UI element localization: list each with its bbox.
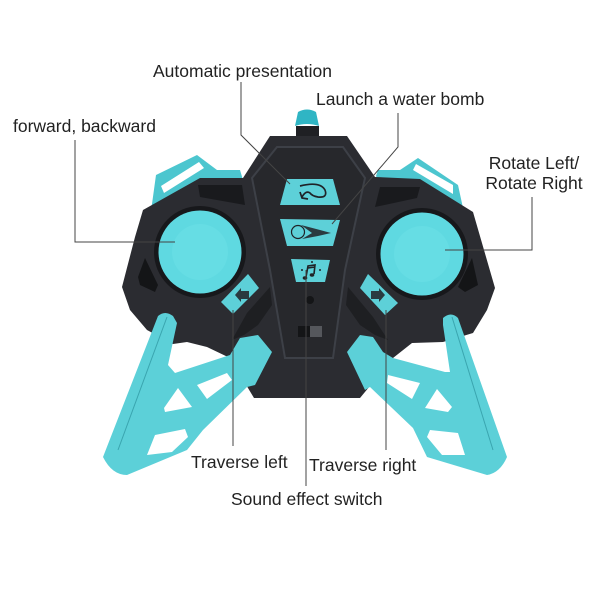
controller body [122,136,495,398]
leader: sound effect switch [305,270,307,486]
controller illustration [103,110,507,475]
label: rotate left: Rotate Left/ [489,153,579,173]
right handle [347,314,507,475]
right handle groove [452,317,493,450]
left vent [198,185,245,205]
left handle [103,313,272,475]
right joystick [376,208,468,300]
button: automatic presentation [280,179,340,205]
label: automatic presentation: Automatic presentation [153,61,332,81]
label: traverse right: Traverse right [309,455,416,475]
label: forward, backward: forward, backward [13,116,156,136]
button: traverse left [221,274,259,314]
centre panel [252,147,365,358]
leader lines [75,82,532,486]
left joystick [154,206,246,298]
antenna [295,110,319,139]
left handle groove [118,317,167,450]
sound switch [298,326,322,337]
top right teal ear [376,158,463,208]
button: traverse right [360,274,398,315]
right side slot [458,258,478,292]
leader: automatic presentation [241,82,290,184]
right vent [375,187,420,207]
right notch shadow [346,287,388,340]
button: sound [291,259,330,282]
left side slot [138,258,158,292]
top left teal ear [150,155,243,210]
leader: launch a water bomb [332,113,398,224]
indicator hole [306,296,314,304]
label: rotate right: Rotate Right [485,173,583,193]
leader: traverse left [232,310,234,446]
label: traverse left: Traverse left [191,452,288,472]
leader: forward, backward [75,140,175,242]
button: water bomb [280,219,340,246]
leader: traverse right [385,310,387,450]
label: launch a water bomb: Launch a water bomb [316,89,484,109]
label: sound effect switch: Sound effect switch [231,489,382,509]
leader: rotate [445,197,532,250]
left notch shadow [232,287,272,340]
